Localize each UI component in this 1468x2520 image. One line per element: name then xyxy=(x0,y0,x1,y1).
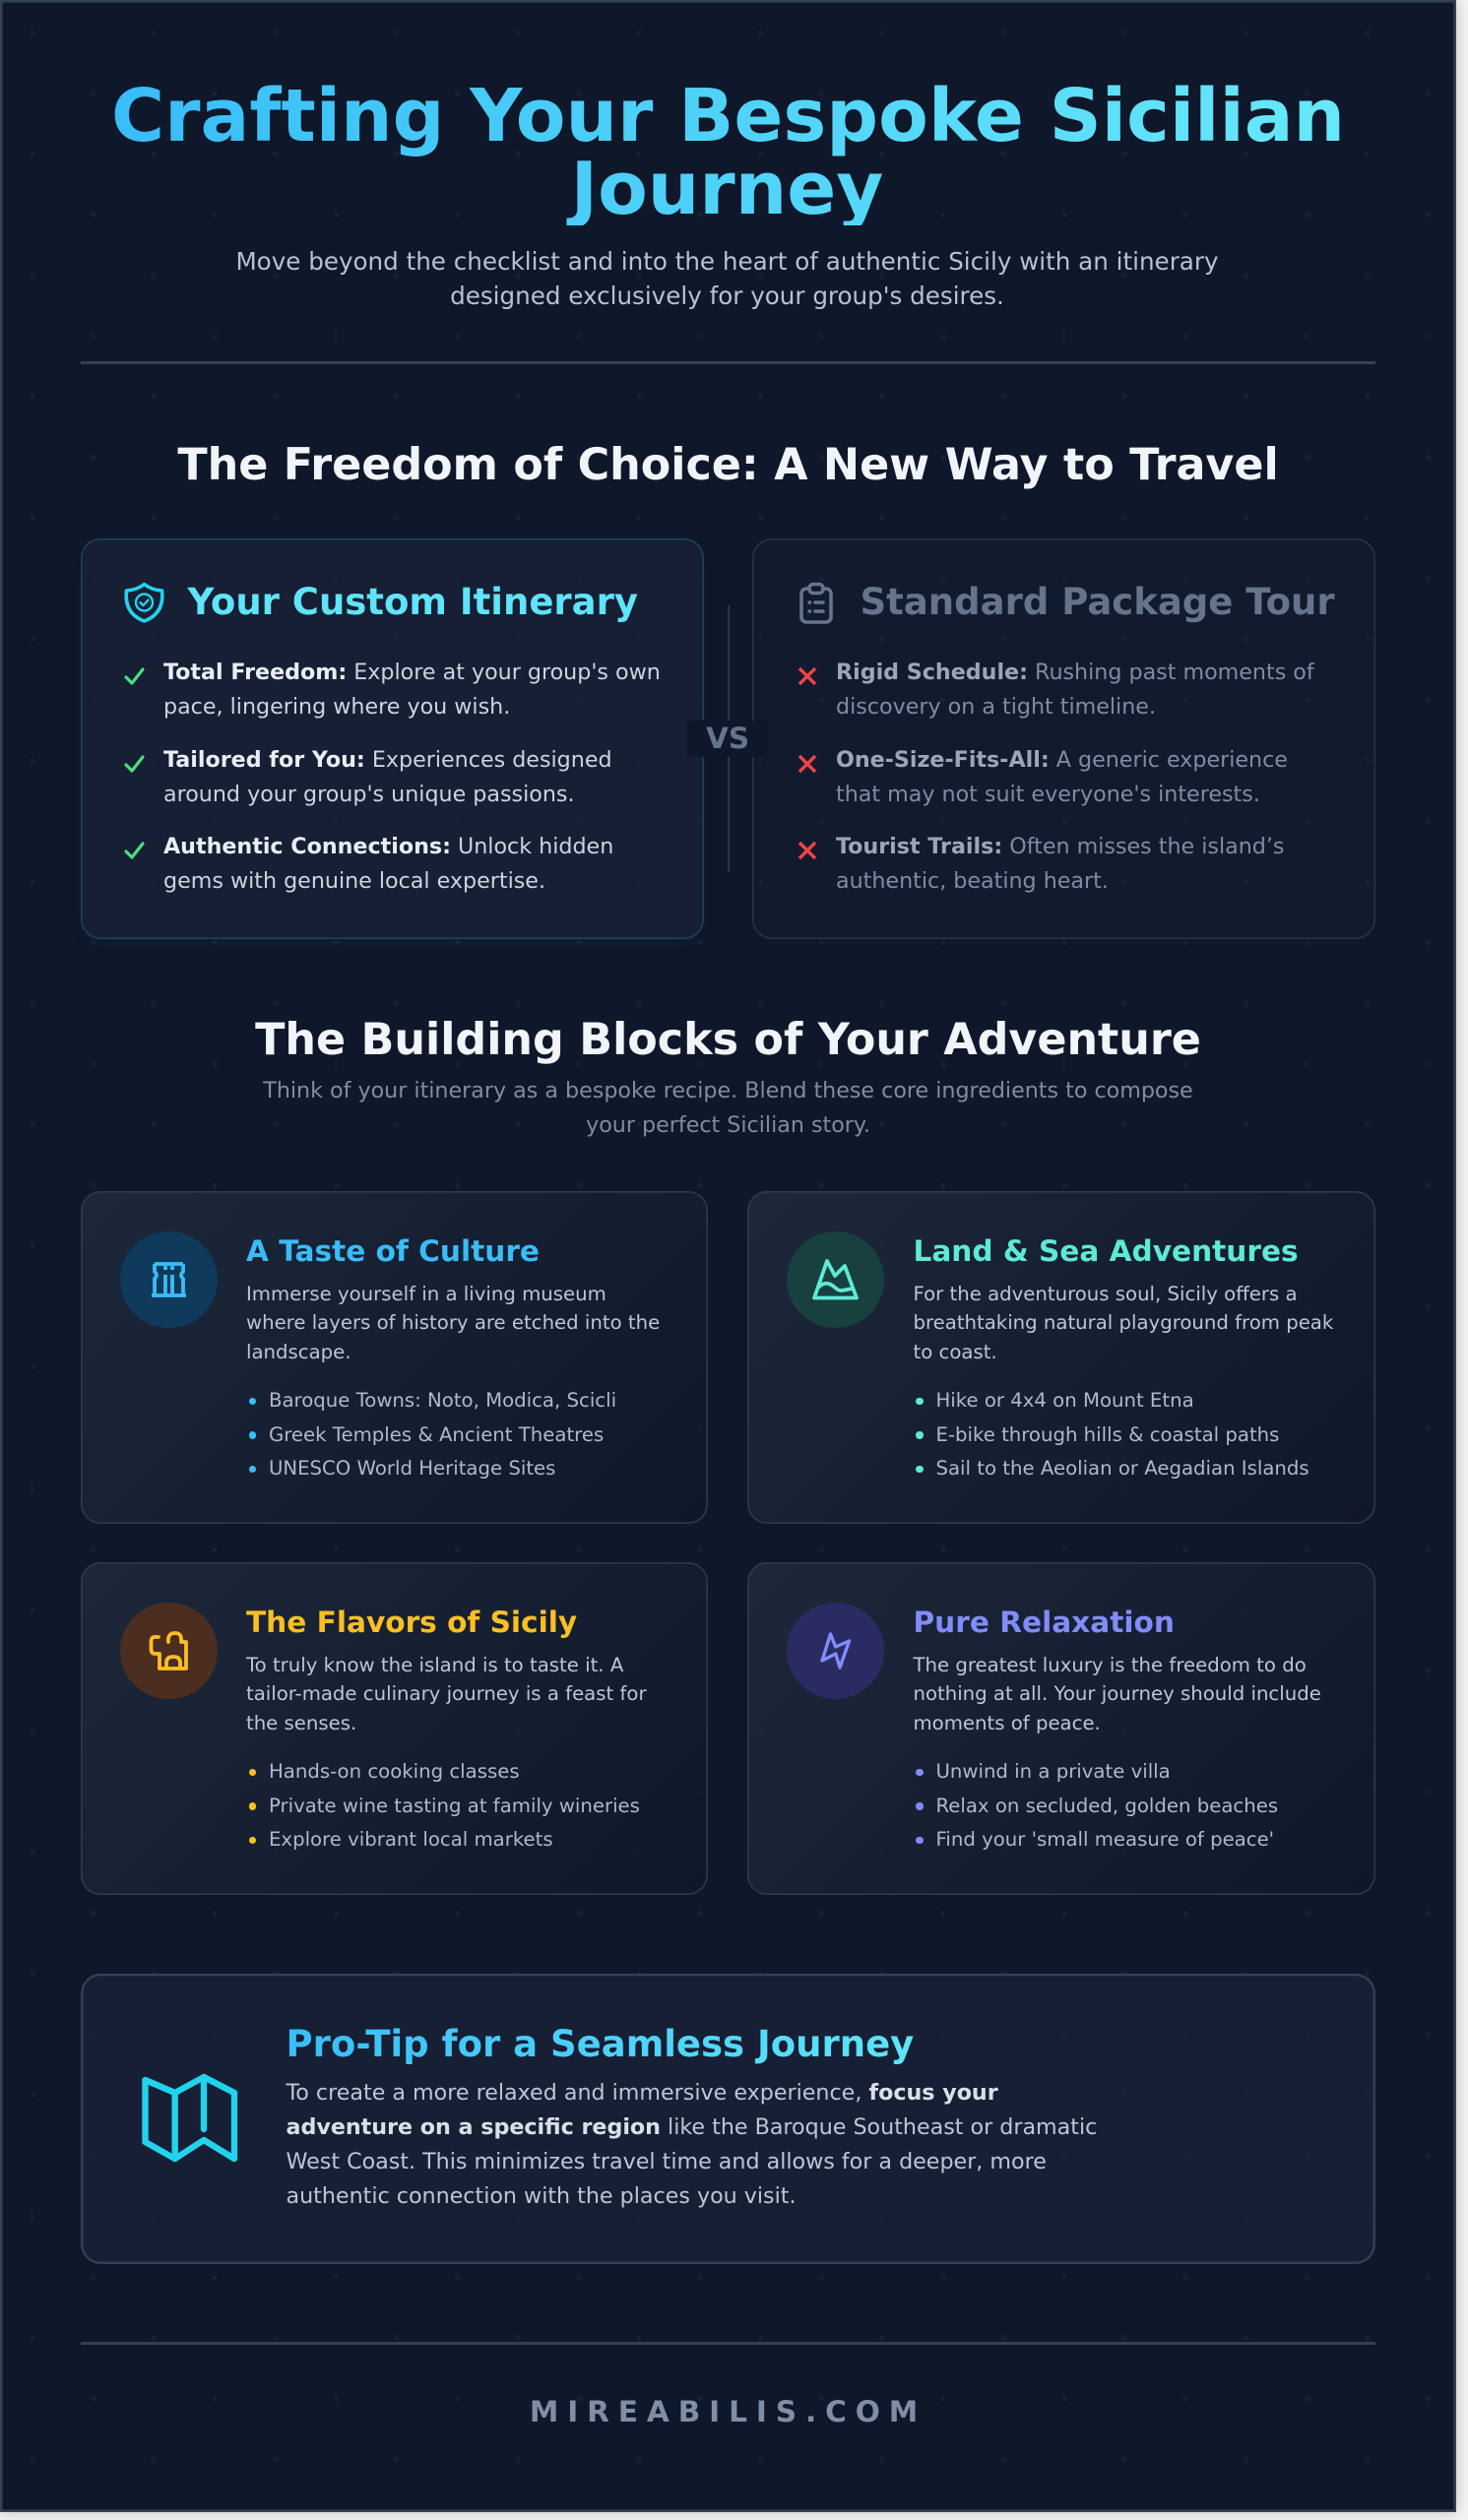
text: relaxation description: moments of peace. xyxy=(913,1712,1101,1734)
text: tourist trails xyxy=(836,834,1284,894)
icon: temple xyxy=(120,1231,218,1328)
text: rigid schedule xyxy=(836,660,1315,720)
icon: cross 2 xyxy=(798,754,817,774)
subtitle xyxy=(235,247,1219,310)
heading: standard package tour: Standard Package Tour xyxy=(861,581,1335,622)
heading: freedom of choice: The Freedom of Choice: A New Way to Travel xyxy=(177,440,1279,490)
text: tailored for you: Tailored for You: Experiences designed xyxy=(163,747,612,773)
heading: land and sea: Land & Sea Adventures xyxy=(913,1234,1299,1268)
icon: chef food xyxy=(120,1603,218,1699)
text: flavors description: tailor-made culinary journey is a feast for xyxy=(246,1682,647,1705)
text: authentic connections: gems with genuine local expertise. xyxy=(163,868,545,894)
text: one size fits all xyxy=(836,747,1288,807)
text: authentic connections xyxy=(163,834,613,894)
text: adventure description: breathtaking natural playground from peak xyxy=(913,1311,1333,1334)
text: flavors description: To truly know the island is to taste it. A xyxy=(246,1654,623,1676)
text: tourist trails: authentic, beating heart. xyxy=(836,868,1109,894)
list: culture highlights xyxy=(249,1389,616,1480)
panel: standard package tour xyxy=(752,538,1375,939)
title: Crafting Your Bespoke Sicilian xyxy=(111,73,1345,158)
list: flavors highlights xyxy=(249,1760,640,1851)
text: relaxation description xyxy=(913,1654,1321,1734)
icon: clipboard xyxy=(799,583,833,624)
heading: a taste of culture: A Taste of Culture xyxy=(246,1234,540,1268)
text: rigid schedule: Rigid Schedule: Rushing past moments of xyxy=(836,660,1314,685)
list: relaxation highlights xyxy=(916,1760,1278,1851)
card: the flavors of sicily xyxy=(81,1562,708,1895)
subtitle: Move beyond the checklist and into the heart of authentic Sicily with an itinerary xyxy=(235,247,1219,276)
icon: bolt xyxy=(787,1603,884,1699)
footer: website: MIREABILIS.COM xyxy=(530,2394,926,2427)
heading: your custom itinerary: Your Custom Itinerary xyxy=(187,581,638,622)
text: culture description: Immerse yourself in a living museum xyxy=(246,1283,606,1305)
text: rigid schedule: discovery on a tight timeline. xyxy=(836,694,1156,720)
vs badge: VS xyxy=(706,722,749,755)
panel: pro tip xyxy=(81,1974,1375,2264)
text: total freedom: pace, lingering where you wish. xyxy=(163,694,510,720)
list: culture highlights: UNESCO World Heritage Sites xyxy=(269,1457,555,1480)
text: adventure description: For the adventurous soul, Sicily offers a xyxy=(913,1283,1298,1305)
text: tourist trails: Tourist Trails: Often misses the island’s xyxy=(836,834,1284,859)
text: culture description: where layers of history are etched into the xyxy=(246,1311,660,1334)
icon: map xyxy=(142,2073,238,2162)
list: adventure highlights xyxy=(916,1389,1309,1480)
heading: pure relaxation: Pure Relaxation xyxy=(913,1606,1175,1639)
text: pro-tip body: authentic connection with the places you visit. xyxy=(286,2183,797,2209)
list: relaxation highlights: Find your 'small measure of peace' xyxy=(935,1828,1274,1851)
panel: custom itinerary xyxy=(81,538,703,939)
text: flavors description xyxy=(246,1654,647,1734)
list: flavors highlights: Hands-on cooking classes xyxy=(269,1760,520,1783)
vs badge xyxy=(687,721,769,757)
title xyxy=(111,79,1343,224)
text: pro-tip body: West Coast. This minimizes travel time and allows for a deeper, more xyxy=(286,2149,1047,2174)
text: relaxation description: The greatest luxury is the freedom to do xyxy=(913,1654,1307,1676)
list: adventure highlights: Sail to the Aeolian or Aegadian Islands xyxy=(935,1457,1309,1480)
heading: building blocks: The Building Blocks of Your Adventure xyxy=(255,1014,1201,1065)
icon: cross 1 xyxy=(798,667,817,685)
text: total freedom xyxy=(163,660,661,720)
icon: check 2 xyxy=(124,755,145,773)
list: flavors highlights: Explore vibrant local markets xyxy=(269,1828,553,1851)
text: relaxation description: nothing at all. Your journey should include xyxy=(913,1682,1321,1705)
text: pro-tip body: To create a more relaxed and immersive experience, focus your xyxy=(286,2080,998,2106)
title: Journey xyxy=(571,146,883,230)
text: adventure description: to coast. xyxy=(913,1341,997,1363)
list: relaxation highlights: Unwind in a private villa xyxy=(935,1760,1171,1783)
card: land and sea adventures xyxy=(747,1191,1375,1524)
list: adventure highlights: Hike or 4x4 on Mount Etna xyxy=(935,1389,1194,1412)
list: relaxation highlights: Relax on secluded, golden beaches xyxy=(935,1795,1278,1817)
text: authentic connections: Authentic Connections: Unlock hidden xyxy=(163,834,613,859)
heading: pro-tip: Pro-Tip for a Seamless Journey xyxy=(286,2022,914,2065)
text: adventure description xyxy=(913,1283,1333,1363)
card: a taste of culture xyxy=(81,1191,708,1524)
text: one size fits all: One-Size-Fits-All: A generic experience xyxy=(836,747,1288,773)
text: one size fits all: that may not suit everyone's interests. xyxy=(836,782,1260,807)
card: pure relaxation xyxy=(747,1562,1375,1895)
section intro text: Think of your itinerary as a bespoke recipe. Blend these core ingredients to compose xyxy=(263,1078,1193,1103)
icon: check 3 xyxy=(124,842,145,859)
icon: shield check xyxy=(124,583,164,623)
heading: flavors of sicily: The Flavors of Sicily xyxy=(246,1606,577,1639)
text: pro-tip body xyxy=(286,2080,1097,2209)
list: culture highlights: Greek Temples & Ancient Theatres xyxy=(269,1423,604,1446)
text: culture description xyxy=(246,1283,660,1363)
icon: cross 3 xyxy=(798,841,817,860)
text: tailored for you xyxy=(163,747,612,807)
list: adventure highlights: E-bike through hills & coastal paths xyxy=(935,1423,1279,1446)
list: flavors highlights: Private wine tasting at family wineries xyxy=(269,1795,640,1817)
icon: mountain xyxy=(787,1231,884,1328)
text: culture description: landscape. xyxy=(246,1341,351,1363)
section intro text xyxy=(263,1078,1193,1138)
text: total freedom: Total Freedom: Explore at your group's own xyxy=(163,660,661,685)
vs divider line xyxy=(728,605,729,872)
section intro text: your perfect Sicilian story. xyxy=(586,1112,870,1138)
subtitle: designed exclusively for your group's desires. xyxy=(450,282,1004,310)
text: flavors description: the senses. xyxy=(246,1712,356,1734)
list: culture highlights: Baroque Towns: Noto, Modica, Scicli xyxy=(269,1389,616,1412)
icon: check 1 xyxy=(124,667,145,685)
text: pro-tip body: adventure on a specific region like the Baroque Southeast or dramatic xyxy=(286,2114,1097,2140)
text: tailored for you: around your group's unique passions. xyxy=(163,782,575,807)
